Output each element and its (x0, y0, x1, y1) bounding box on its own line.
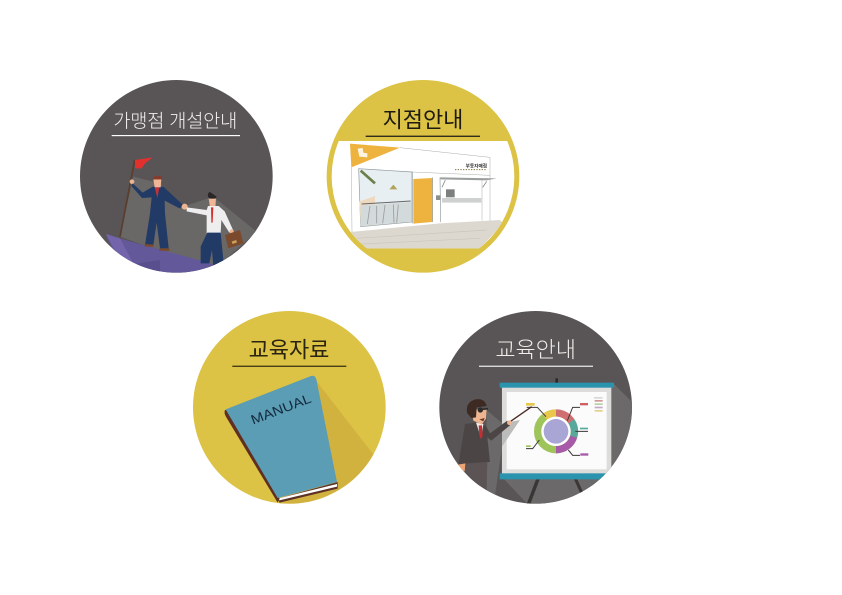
illustration: businessmen climbing (106, 157, 257, 278)
flag (120, 160, 135, 237)
panel: franchise opening guide (80, 80, 273, 278)
facade lines (351, 148, 490, 232)
head (472, 408, 487, 425)
store sign: 부동자매점 (466, 163, 487, 170)
cover title: MANUAL (249, 391, 313, 427)
circle background (193, 311, 386, 504)
heading: training guide: 교육안내 (495, 337, 576, 362)
heading: training materials: 교육자료 (249, 337, 329, 362)
screen top bar (500, 383, 614, 388)
heading underline (479, 366, 593, 367)
white backdrop (327, 141, 520, 248)
handshake (182, 204, 188, 210)
heading underline (232, 366, 346, 367)
chart legend (594, 397, 603, 412)
screen (502, 387, 611, 475)
spine (225, 410, 280, 503)
presenter (458, 421, 510, 465)
heading underline (112, 135, 240, 136)
hill (106, 234, 215, 273)
heading underline (366, 136, 480, 137)
pendant mark (389, 185, 397, 189)
chart callouts (526, 407, 588, 455)
cover (226, 376, 337, 498)
panel: training guide (439, 311, 637, 507)
circle background (439, 311, 632, 504)
orange door (413, 178, 432, 224)
screen stand (555, 378, 558, 383)
heading: branch guide: 지점안내 (383, 107, 463, 132)
panel: training materials (193, 311, 386, 507)
service hatch (440, 177, 497, 180)
panel: branch guide (327, 80, 520, 273)
screen bottom bar (500, 473, 614, 479)
orange pennant (350, 144, 400, 167)
briefcase (225, 230, 243, 248)
illustration: store front (327, 141, 520, 248)
circle background (80, 80, 273, 273)
leader (130, 179, 134, 184)
heading: franchise opening guide: 가맹점 개설안내 (113, 110, 237, 131)
pointer (509, 407, 532, 423)
circle background (327, 80, 519, 273)
pages (278, 482, 338, 503)
long shadow (278, 380, 375, 507)
floor (351, 220, 503, 248)
icon: manual book (225, 376, 375, 507)
donut chart (538, 413, 574, 450)
glass window (359, 169, 412, 227)
long shadow (502, 383, 637, 507)
arm shadow on screen (502, 420, 520, 447)
assistant (209, 198, 216, 207)
